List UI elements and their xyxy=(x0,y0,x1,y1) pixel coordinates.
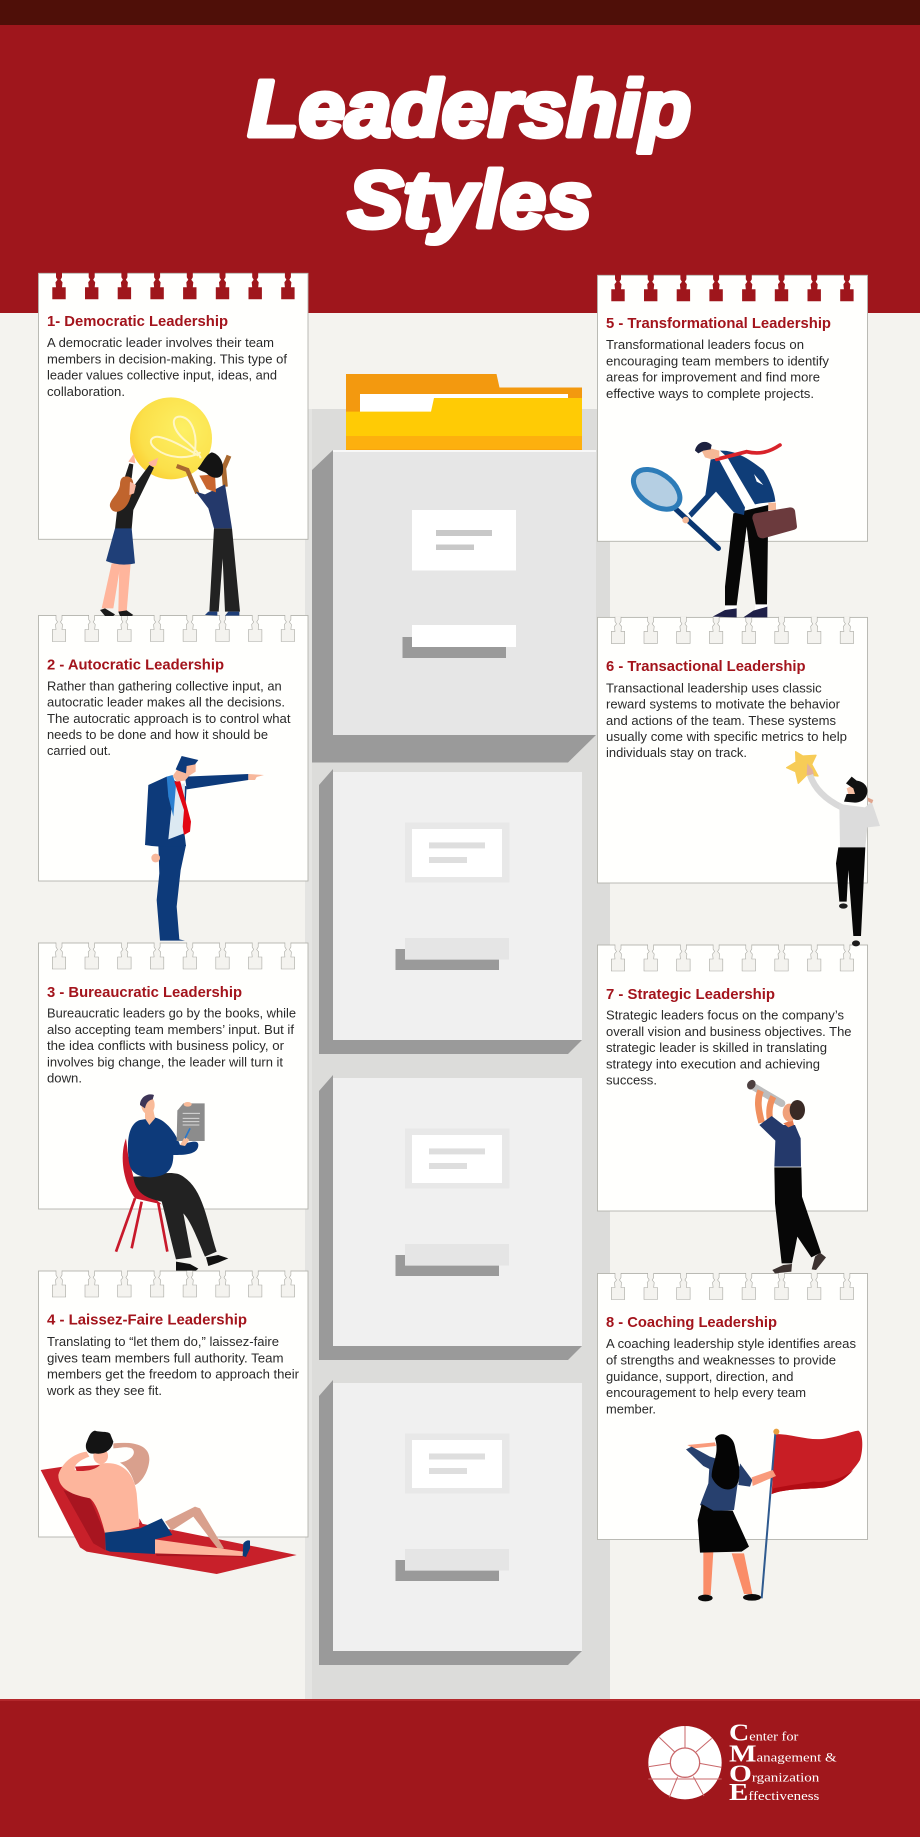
icon: man with magnifying glass and briefcase xyxy=(626,442,797,617)
icon: man in suit pointing xyxy=(145,756,264,941)
panel: 3 Bureaucratic Leadership xyxy=(38,942,308,1209)
icon: two people lifting a light bulb xyxy=(100,397,240,616)
body text: autocratic leader makes all the decisions. xyxy=(47,695,285,710)
body text: areas for improvement and find more xyxy=(606,370,820,385)
body text: A democratic leader involves their team xyxy=(47,335,274,350)
body text: Transactional leadership uses classic xyxy=(606,680,822,695)
heading: 2 - Autocratic Leadership xyxy=(47,656,224,673)
body text: also accepting team members’ input. But if xyxy=(47,1022,294,1037)
body text: work as they see fit. xyxy=(46,1383,162,1398)
heading: 5 - Transformational Leadership xyxy=(606,315,831,332)
drawer 3 xyxy=(319,1075,582,1360)
panel: 5 Transformational Leadership xyxy=(598,273,868,541)
body text xyxy=(606,1008,852,1088)
body text: encouragement to help every team xyxy=(606,1385,806,1400)
panel: 2 Autocratic Leadership xyxy=(38,615,308,881)
filing cabinet xyxy=(305,374,610,1699)
drawer 2 xyxy=(319,769,582,1054)
body text: needs to be done and how it should be xyxy=(47,727,268,742)
body text: down. xyxy=(47,1071,82,1086)
body text: involves big change, the leader will turn it xyxy=(47,1054,283,1069)
heading: 7 - Strategic Leadership xyxy=(606,986,775,1003)
body text xyxy=(47,1006,296,1086)
body text: gives team members full authority. Team xyxy=(47,1350,284,1365)
body text xyxy=(606,1336,856,1416)
top dark bar xyxy=(0,0,920,25)
body text: leader values collective input, ideas, and xyxy=(47,368,277,383)
logo wordmark xyxy=(729,1720,837,1806)
body text: individuals stay on track. xyxy=(606,745,747,760)
logo wordmark: Effectiveness xyxy=(729,1779,819,1806)
panel: 8 Coaching Leadership xyxy=(598,1273,868,1540)
heading: 8 - Coaching Leadership xyxy=(606,1314,777,1331)
icon: woman with red flag xyxy=(686,1429,862,1601)
icon: man looking through a spyglass xyxy=(745,1078,826,1273)
body text: and actions of the team. These systems xyxy=(606,713,836,728)
body text: members in decision-making. This type of xyxy=(47,351,287,366)
body text: Rather than gathering collective input, an xyxy=(47,678,282,694)
logo mark xyxy=(648,1726,722,1799)
body text: The autocratic approach is to control what xyxy=(47,711,291,726)
title: Styles xyxy=(348,155,592,244)
body text: reward systems to motivate the behavior xyxy=(606,696,841,712)
title: Leadership xyxy=(248,64,691,153)
body text xyxy=(606,337,829,401)
body text: overall vision and business objectives. The xyxy=(606,1024,852,1039)
logo: Center for Management & Organization Effectiveness xyxy=(648,1720,837,1806)
footer band xyxy=(0,1699,920,1837)
body text: encouraging team members to identify xyxy=(606,353,829,368)
body text: strategy into execution and achieving xyxy=(606,1056,820,1071)
body text: members get the freedom to approach their xyxy=(47,1367,300,1382)
body text: effective ways to complete projects. xyxy=(606,386,814,401)
folder xyxy=(346,374,582,450)
body text: collaboration. xyxy=(47,384,125,399)
header band xyxy=(0,25,920,313)
heading: 6 - Transactional Leadership xyxy=(606,658,806,675)
heading: 3 - Bureaucratic Leadership xyxy=(47,984,242,1001)
top open drawer xyxy=(312,450,596,762)
logo wordmark: Organization xyxy=(729,1760,820,1787)
heading: 4 - Laissez-Faire Leadership xyxy=(47,1312,247,1328)
body text: Strategic leaders focus on the company’s xyxy=(606,1008,844,1023)
body text: of strengths and weaknesses to provide xyxy=(606,1352,836,1367)
body text xyxy=(46,1334,300,1398)
body text: the idea conflicts with business policy, or xyxy=(47,1038,285,1053)
body text: Transformational leaders focus on xyxy=(606,337,804,352)
body text: success. xyxy=(606,1073,657,1088)
body text: Bureaucratic leaders go by the books, while xyxy=(47,1006,296,1020)
heading: 1- Democratic Leadership xyxy=(47,313,228,330)
body text: usually come with specific metrics to help xyxy=(606,729,847,744)
body text xyxy=(47,678,291,758)
panel: 7 Strategic Leadership xyxy=(598,944,868,1211)
body text: carried out. xyxy=(47,743,111,758)
panel: 6 Transactional Leadership xyxy=(598,617,868,883)
body text: strategic leader is skilled in translating xyxy=(606,1040,827,1055)
icon: man seated reading a document xyxy=(116,1094,228,1271)
panel: 1 Democratic Leadership xyxy=(38,271,308,539)
icon: man relaxing on red blanket xyxy=(41,1431,297,1574)
body text xyxy=(47,335,287,399)
title xyxy=(248,64,691,244)
body text: guidance, support, direction, and xyxy=(606,1369,794,1384)
body text xyxy=(606,680,847,760)
panel: 4 Laissez-Faire Leadership xyxy=(38,1270,308,1537)
body text: member. xyxy=(606,1402,656,1416)
body text: A coaching leadership style identifies areas xyxy=(606,1336,856,1351)
icon: man reaching for a star xyxy=(787,752,880,946)
body text: Translating to “let them do,” laissez-faire xyxy=(47,1334,279,1349)
drawer 4 xyxy=(319,1380,582,1665)
logo wordmark: Center for xyxy=(729,1720,799,1747)
logo wordmark: Management & xyxy=(729,1740,837,1767)
